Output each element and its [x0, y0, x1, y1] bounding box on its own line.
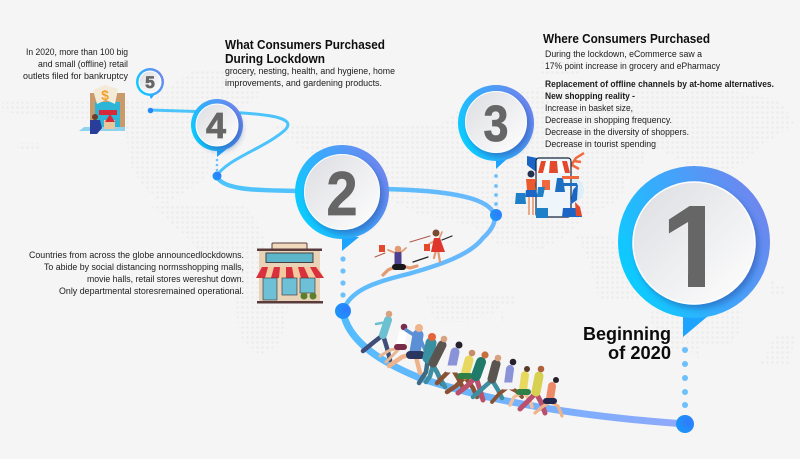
runner 2 — [380, 324, 407, 362]
runner 13 — [535, 377, 562, 416]
text block: stage 5 bankruptcy: and small (offline) retail — [38, 59, 128, 70]
text block: stage 5 bankruptcy: outlets filed for bankruptcy — [23, 71, 128, 82]
path node markers — [148, 108, 694, 433]
runner 8 — [458, 351, 489, 400]
journey path: start to stage 2 — [343, 311, 685, 424]
heading: what consumers purchased: What Consumers Purchased — [225, 37, 385, 52]
text block: stage 3 where consumers purchased: Decrease in shopping frequency. — [545, 115, 672, 126]
icon: shop — [256, 243, 324, 304]
runner 4 — [419, 333, 442, 384]
text block: stage 3 where consumers purchased — [543, 31, 774, 150]
body: products: grocery, nesting, health, and hygiene, home — [225, 66, 395, 77]
number 1: 1 — [662, 182, 727, 312]
runner 7 — [447, 350, 477, 397]
runner 1 — [363, 311, 392, 360]
text block: stage 5 bankruptcy — [23, 47, 128, 82]
illustration: two shoppers running — [375, 230, 452, 275]
text block: stage 2 lockdowns: movie halls, retail stores wereshut down. — [87, 274, 244, 285]
icon: bankruptcy store: $ — [101, 87, 109, 103]
text block: beginning of 2020: of 2020 — [608, 342, 671, 363]
journey path: stage 4 to stage 5 — [150, 110, 288, 176]
text block: stage 3 where consumers purchased: Increase in basket size, — [545, 103, 633, 114]
connector dots — [216, 159, 688, 408]
runner 6 — [437, 342, 462, 386]
text block: stage 3 where consumers purchased: Decrease in the diversity of shoppers. — [545, 127, 689, 138]
heading: where consumers purchased: Where Consumers Purchased — [543, 31, 710, 46]
runner: man with bag — [379, 245, 417, 275]
runner 5 — [426, 336, 447, 387]
text block: stage 2 lockdowns: Only departmental storesremained operational. — [59, 286, 244, 297]
pin 4 — [191, 99, 243, 157]
runner: woman with bag — [424, 230, 445, 262]
icon: bankruptcy store — [79, 85, 125, 134]
text block: stage 4 what consumers purchased: improvements, and gardening products. — [225, 78, 382, 89]
runner 3 — [389, 324, 427, 373]
text block: stage 4 what consumers purchased — [225, 37, 395, 89]
text block: stage 2 lockdowns — [29, 250, 244, 297]
body: ecommerce: During the lockdown, eCommerce saw a — [545, 49, 703, 60]
pin 3 — [458, 85, 534, 169]
text block: stage 3 where consumers purchased: Replacement of offline channels by at-home alternatives. — [545, 79, 774, 90]
heading: during lockdown: During Lockdown — [225, 51, 325, 66]
runner 12 — [520, 366, 545, 413]
number 2: 2 — [326, 160, 358, 229]
runner 11 — [510, 366, 532, 407]
text block: stage 2 lockdowns: Countries from across the globe announcedlockdowns. — [29, 250, 244, 261]
text block: stage 3 where consumers purchased: Decrease in tourist spending — [545, 139, 656, 150]
world map dots — [2, 60, 795, 365]
runner 10 — [492, 359, 522, 402]
pin 1 — [618, 166, 770, 337]
icon: phone shop with shopper — [515, 153, 584, 218]
text block: stage 2 lockdowns: To abide by social distancing normsshopping malls, — [44, 262, 244, 273]
pin 5 — [136, 68, 164, 99]
illustration: crowd of runners — [363, 311, 562, 416]
runner 9 — [473, 355, 502, 398]
number 4: 4 — [206, 105, 226, 146]
journey path: stage 2 to stage 4 — [217, 176, 495, 311]
number 3: 3 — [484, 95, 508, 152]
text block: stage 5 bankruptcy: In 2020, more than 100 big — [26, 47, 128, 58]
pin 2 — [295, 145, 389, 251]
text block: beginning of 2020 — [583, 323, 671, 363]
text block: stage 3 where consumers purchased: 17% point increase in grocery and ePharmacy — [545, 61, 720, 72]
text block: stage 3 where consumers purchased: New shopping reality - — [545, 91, 635, 102]
text block: beginning of 2020: Beginning — [583, 323, 671, 344]
number 5: 5 — [145, 73, 155, 92]
